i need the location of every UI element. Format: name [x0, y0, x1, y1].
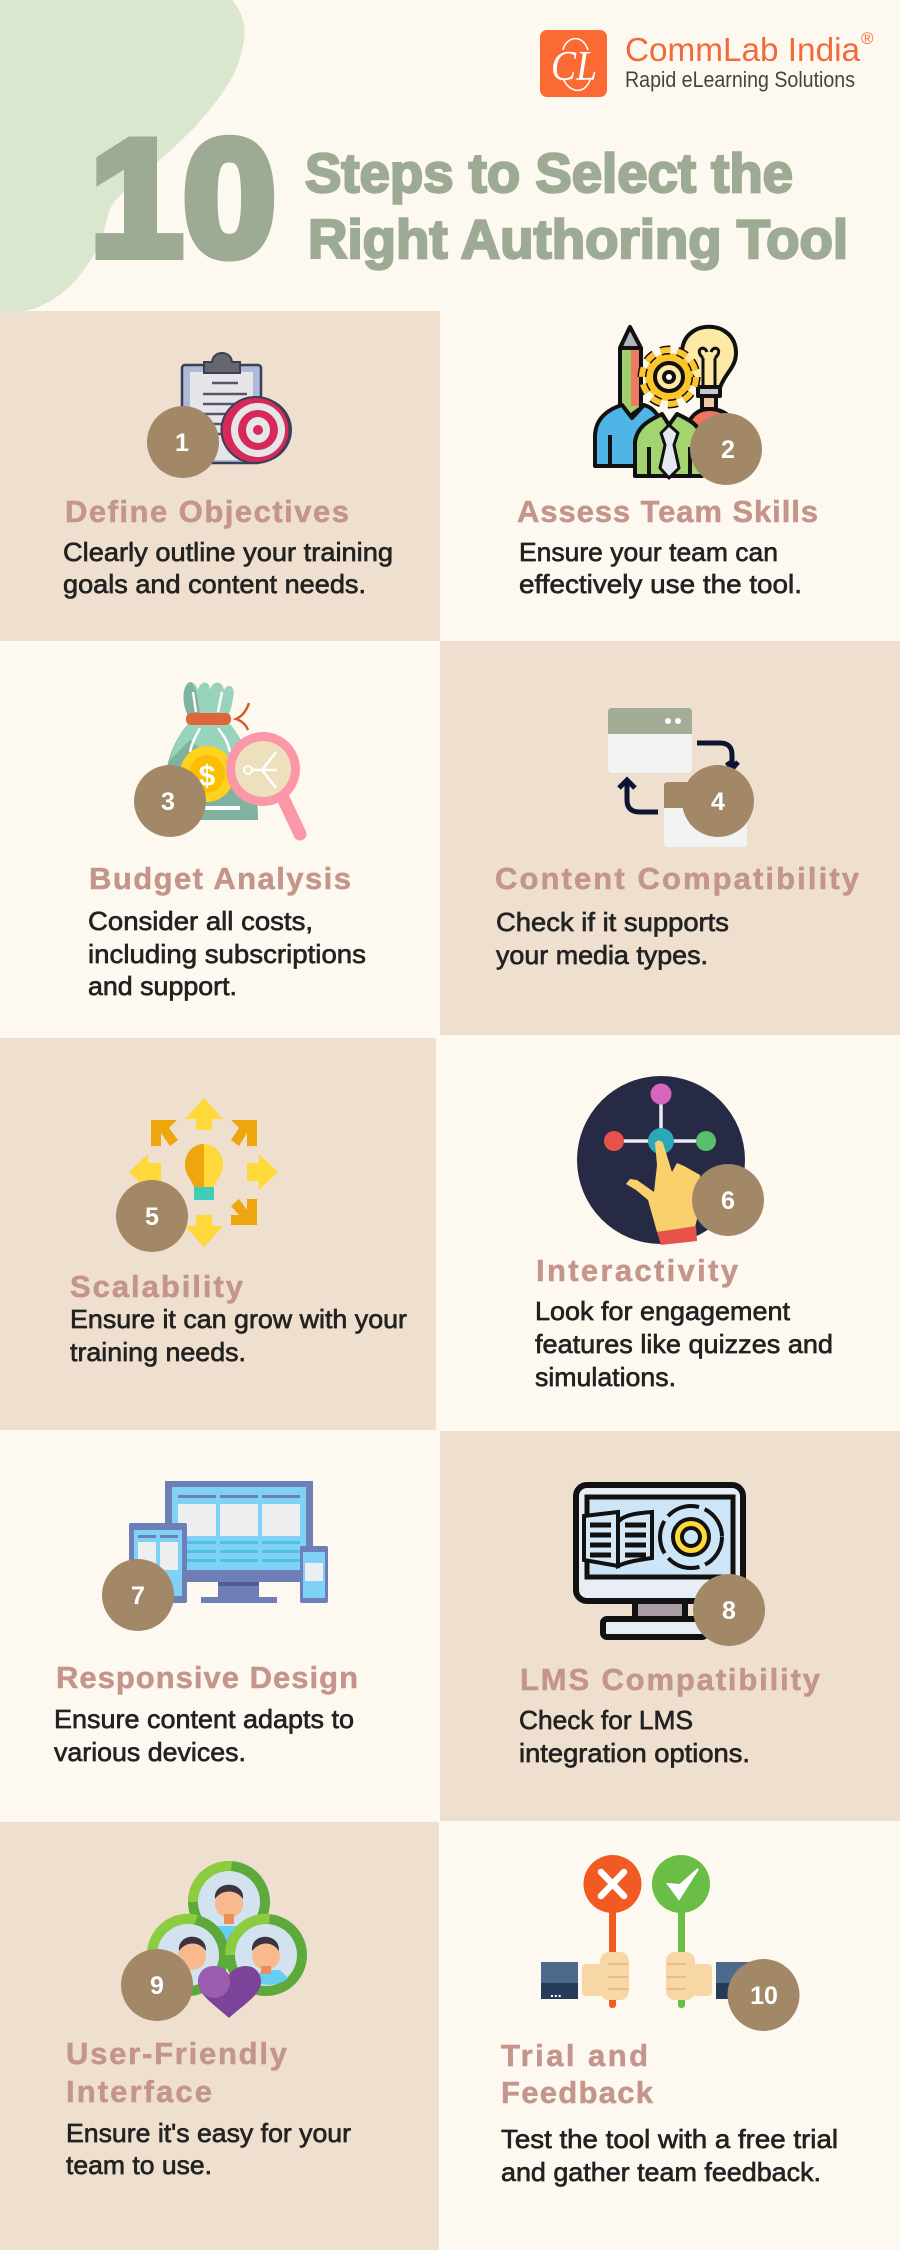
icon: hands holding cross and check signs: ... — [550, 1984, 562, 2000]
body text — [66, 2118, 351, 2180]
number badge 5 — [116, 1180, 188, 1252]
body text: Consider all costs, — [88, 906, 313, 936]
body text: goals and content needs. — [63, 569, 366, 599]
logo tagline: Rapid eLearning Solutions — [625, 67, 855, 92]
body text: Ensure content adapts to — [54, 1704, 354, 1734]
number badge 1 — [147, 406, 219, 478]
heading: Define Objectives — [65, 494, 349, 529]
heading: Interactivity — [536, 1253, 739, 1288]
body text: integration options. — [519, 1738, 750, 1768]
panel: step 9 user-friendly interface — [0, 1822, 439, 2250]
body text: Look for engagement — [535, 1296, 791, 1326]
number badge 4 — [682, 765, 754, 837]
number badge 5: 5 — [145, 1203, 159, 1231]
body text — [501, 2124, 838, 2187]
heading: Content Compatibility — [495, 861, 860, 896]
body text: and gather team feedback. — [501, 2157, 821, 2187]
icon: responsive devices — [129, 1481, 328, 1603]
big number 10: 10 — [90, 106, 276, 290]
body text: Ensure it can grow with your — [70, 1304, 407, 1334]
panel: step 8 LMS compatibility — [440, 1431, 900, 1821]
number badge 2 — [690, 413, 762, 485]
number badge 6 — [692, 1164, 764, 1236]
icon: money bag and magnifier: $ — [199, 760, 216, 793]
body text — [496, 907, 729, 970]
body text: Check if it supports — [496, 907, 729, 937]
icon: bulb with expanding arrows — [129, 1098, 278, 1247]
body text: and support. — [88, 971, 237, 1001]
number badge 1: 1 — [175, 429, 189, 457]
body text — [70, 1304, 407, 1367]
heading: Responsive Design — [56, 1660, 358, 1695]
body text — [63, 537, 393, 599]
number badge 7 — [102, 1559, 174, 1631]
heading: Feedback — [501, 2075, 654, 2110]
body text: including subscriptions — [88, 939, 366, 969]
heading — [501, 2038, 654, 2110]
body text: various devices. — [54, 1737, 246, 1767]
number badge 9: 9 — [150, 1972, 164, 2000]
heading — [66, 2036, 288, 2109]
body text: simulations. — [535, 1362, 676, 1392]
heading: Scalability — [70, 1269, 244, 1304]
number badge 3: 3 — [161, 788, 175, 816]
body text: training needs. — [70, 1337, 246, 1367]
body text — [88, 906, 366, 1001]
title: Steps to Select the — [305, 142, 793, 204]
body text: your media types. — [496, 940, 708, 970]
title — [305, 142, 848, 270]
number badge 10: 10 — [750, 1982, 778, 2010]
body text — [519, 1705, 750, 1768]
logo mark — [540, 30, 607, 97]
body text: Test the tool with a free trial — [501, 2124, 838, 2154]
panel: step 3 budget analysis — [88, 682, 366, 1001]
number badge 2: 2 — [721, 436, 735, 464]
number badge 7: 7 — [131, 1582, 145, 1610]
number badge 6: 6 — [721, 1187, 735, 1215]
body text: Ensure it's easy for your — [66, 2118, 351, 2148]
heading: Trial and — [501, 2038, 648, 2073]
body text — [535, 1296, 833, 1392]
icon: money bag and magnifier — [163, 682, 300, 834]
body text — [519, 537, 802, 599]
body text: Clearly outline your training — [63, 537, 393, 567]
panel: step 10 trial and feedback — [501, 1855, 838, 2187]
panel: step 5 scalability — [0, 1038, 436, 1430]
body text: Check for LMS — [519, 1705, 693, 1735]
body text: Ensure your team can — [519, 537, 778, 567]
number badge 10 — [728, 1959, 800, 2031]
icon: hand touching network — [577, 1076, 745, 1245]
heading: Budget Analysis — [89, 861, 351, 896]
body text: effectively use the tool. — [519, 569, 802, 599]
panel: step 7 responsive design — [54, 1481, 358, 1767]
body text — [54, 1704, 354, 1767]
logo name: CommLab India — [625, 31, 861, 68]
icon: three users and heart — [147, 1861, 307, 2018]
icon: monitor with book and gear — [576, 1485, 743, 1637]
panel: step 1 define objectives — [0, 311, 440, 641]
body text: features like quizzes and — [535, 1329, 833, 1359]
heading: LMS Compatibility — [520, 1662, 821, 1697]
registered mark: ® — [861, 29, 874, 48]
icon: team with pencil, gear and bulb — [595, 327, 737, 478]
number badge 8 — [693, 1574, 765, 1646]
panel: step 2 assess team skills — [517, 327, 818, 599]
icon: hands holding cross and check signs — [541, 1855, 750, 2008]
number badge 9 — [121, 1949, 193, 2021]
heading: Assess Team Skills — [517, 494, 818, 529]
decorative green blob — [0, 0, 245, 311]
logo — [540, 29, 874, 97]
panel: step 4 content compatibility — [440, 641, 900, 1035]
logo mark: CL — [551, 44, 597, 90]
icon: clipboard and target — [182, 353, 292, 463]
number badge 8: 8 — [722, 1597, 736, 1625]
body text: team to use. — [66, 2150, 212, 2180]
heading: User-Friendly — [66, 2036, 288, 2071]
number badge 4: 4 — [711, 788, 725, 816]
number badge 3 — [134, 765, 206, 837]
icon: two windows with cycle arrows — [608, 708, 747, 847]
panel: step 6 interactivity — [535, 1076, 833, 1392]
title: Right Authoring Tool — [308, 208, 848, 270]
heading: Interface — [66, 2074, 212, 2109]
